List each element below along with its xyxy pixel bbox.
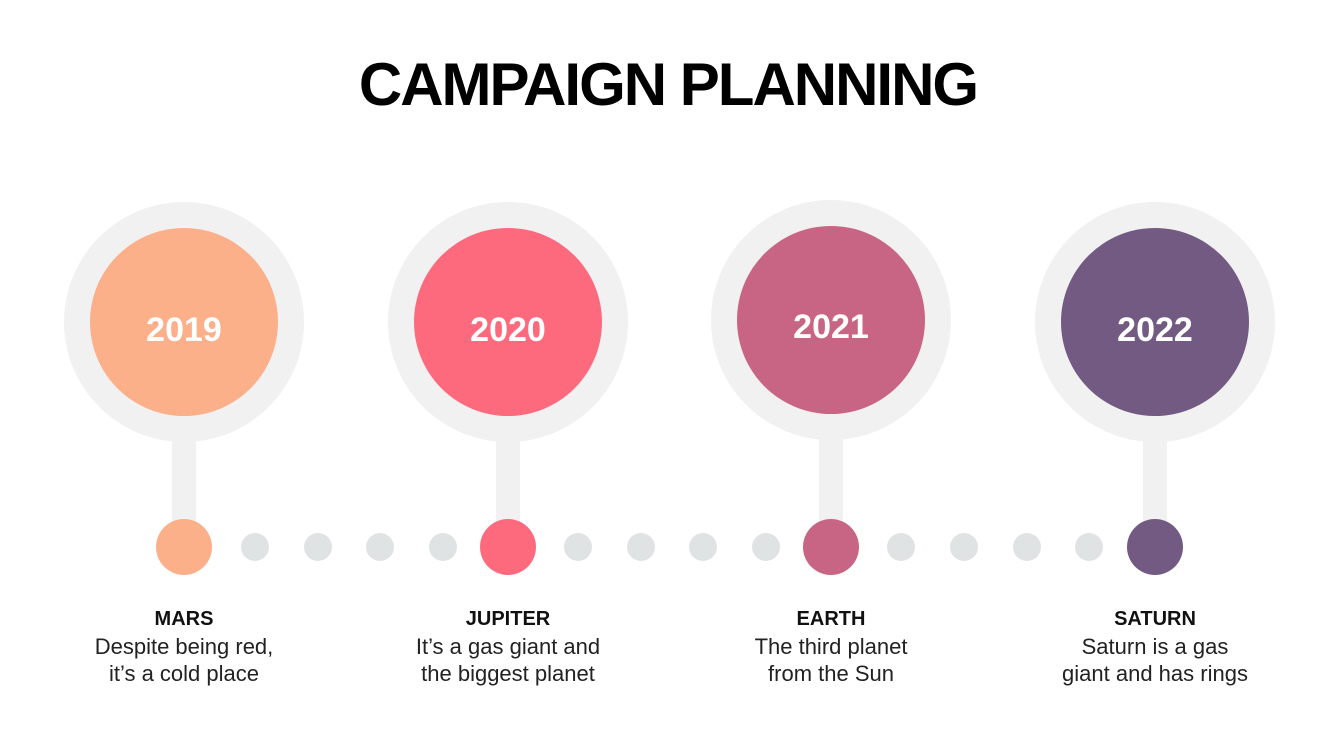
milestone 2021: 2021 (793, 308, 869, 346)
label: jupiter: the biggest planet (421, 661, 595, 686)
label: earth: The third planet (755, 634, 907, 659)
label: saturn: SATURN (1114, 608, 1196, 630)
label: jupiter: It’s a gas giant and (416, 634, 600, 659)
label: saturn: giant and has rings (1062, 661, 1248, 686)
milestone 2022: 2022 (1117, 311, 1193, 349)
label: earth (755, 608, 908, 686)
label: earth: EARTH (797, 608, 865, 630)
label: mars: Despite being red, (95, 634, 273, 659)
gray dots (241, 533, 1103, 561)
label: jupiter: JUPITER (466, 608, 550, 630)
milestone 2022 (1035, 202, 1275, 575)
milestone 2021 (711, 200, 951, 575)
label: mars: MARS (155, 608, 213, 630)
label: mars: it’s a cold place (109, 661, 259, 686)
label: jupiter (416, 608, 600, 686)
milestone 2019 (64, 202, 304, 575)
label: saturn (1062, 608, 1248, 686)
milestone 2020 (388, 202, 628, 575)
label: saturn: Saturn is a gas (1082, 634, 1228, 659)
label: mars (95, 608, 273, 686)
milestone 2020: 2020 (470, 311, 546, 349)
label: earth: from the Sun (768, 661, 894, 686)
title: CAMPAIGN PLANNING (359, 51, 977, 118)
milestone 2019: 2019 (146, 311, 222, 349)
